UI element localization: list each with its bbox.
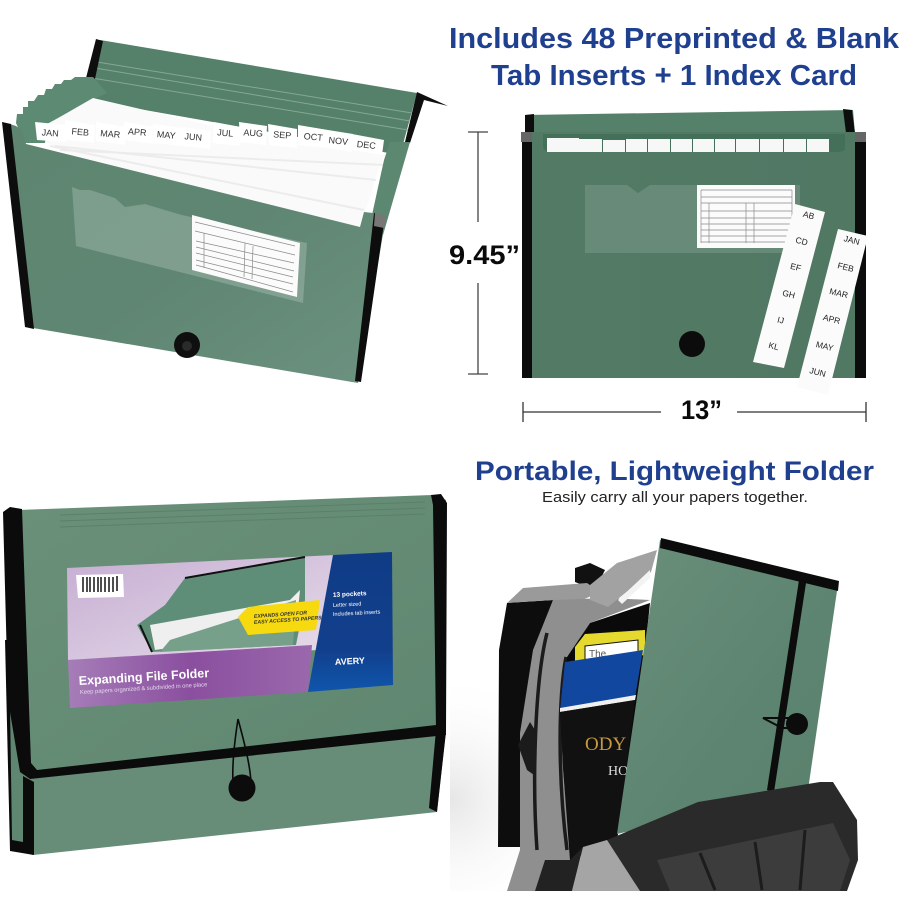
label strip AB to KL: GH (781, 288, 796, 300)
heading: portable: Portable, Lightweight Folder (475, 456, 875, 486)
panel: closed folder with label (3, 494, 447, 855)
label specs: 13 pockets (333, 590, 367, 599)
label strip JAN to JUN: MAY (815, 339, 835, 353)
label strip AB to KL: EF (789, 261, 802, 273)
label strip JAN to JUN: FEB (836, 260, 855, 274)
yellow notebook (575, 630, 645, 665)
white stripe (560, 695, 636, 712)
label specs: Letter sized (333, 602, 362, 609)
folder body (522, 132, 866, 378)
month tabs: AUG (243, 127, 263, 139)
label title: Expanding File Folder (78, 666, 210, 688)
heading: tab inserts: Includes 48 Preprinted & Blank (449, 23, 900, 55)
lower body (10, 690, 446, 855)
dimension: height (449, 132, 520, 374)
accordion gusset (16, 77, 107, 143)
heading: tab inserts (449, 23, 900, 92)
lower binding (5, 640, 34, 855)
back flap (88, 40, 417, 155)
photo background (450, 670, 580, 891)
yellow notebook: The (589, 649, 607, 660)
black book (560, 700, 635, 860)
month tabs: DEC (356, 139, 377, 151)
index card (192, 215, 300, 297)
backpack handle strap (575, 563, 605, 590)
month tabs: FEB (71, 126, 89, 138)
label photo area (67, 555, 335, 660)
papers (46, 98, 385, 227)
flap (18, 495, 446, 773)
label strip AB to KL: AB (802, 209, 816, 221)
product label (67, 552, 393, 708)
label strip AB to KL (753, 204, 825, 368)
mini folder (137, 557, 305, 652)
month tabs: JAN (41, 127, 59, 139)
label strip JAN to JUN: APR (822, 312, 841, 326)
binding caps (521, 132, 866, 142)
month tabs: JUN (184, 131, 202, 143)
label strip JAN to JUN: JAN (843, 233, 861, 247)
tab slot (543, 134, 845, 152)
index card (697, 185, 795, 248)
month tabs: SEP (273, 129, 292, 141)
zips (535, 633, 567, 850)
yellow tag (238, 600, 322, 635)
dimension: width: 13” (681, 395, 722, 425)
backpack top (507, 583, 600, 610)
lower strap (535, 847, 583, 891)
elastic loop (233, 719, 251, 782)
month tabs: MAR (100, 128, 121, 140)
yellow tag: EASY ACCESS TO PAPERS (254, 615, 322, 626)
dimension: width (523, 395, 866, 425)
back flap (525, 110, 855, 134)
flap lining (657, 823, 850, 891)
front panel (10, 124, 384, 383)
blue folder (560, 650, 643, 710)
backpack side body (507, 598, 650, 891)
label strip AB to KL: CD (795, 235, 809, 247)
avery logo: AVERY (335, 655, 365, 667)
label strip AB to KL: KL (767, 340, 780, 352)
zipper pull (518, 722, 535, 775)
barcode (76, 574, 124, 598)
label strip JAN to JUN: MAR (828, 286, 849, 300)
backpack handle (590, 550, 657, 607)
back flap black edges (86, 39, 448, 143)
tab strip (547, 138, 829, 152)
dimension: height: 9.45” (449, 240, 520, 270)
right gusset (372, 142, 410, 235)
heading: tab inserts: Tab Inserts + 1 Index Card (491, 60, 857, 92)
purple band (68, 645, 312, 708)
elastic loop (763, 718, 795, 728)
blue panel (308, 552, 393, 692)
label strip JAN to JUN (797, 229, 868, 395)
label strip JAN to JUN: JUN (808, 365, 827, 379)
side bindings (2, 122, 385, 382)
month tabs: MAY (156, 129, 176, 141)
panel: front folder with dimensions (521, 109, 868, 395)
button (228, 774, 256, 802)
clear pocket (585, 185, 800, 253)
black book: HO (608, 764, 628, 779)
label strip AB to KL: IJ (776, 314, 785, 326)
label specs: Includes tab inserts (333, 610, 381, 618)
label specs (333, 590, 381, 618)
clear pocket (72, 187, 307, 303)
button (174, 332, 200, 358)
handle gap (618, 570, 650, 604)
backpack front flap (583, 782, 858, 891)
subheading: Easily carry all your papers together. (542, 490, 808, 506)
panel: open folder with month tabs (2, 39, 448, 383)
black book: ODY (585, 734, 626, 755)
side bindings (522, 132, 866, 378)
panel: folder in backpack photo (450, 538, 858, 891)
button (786, 713, 808, 735)
button (679, 331, 705, 357)
elastic band (767, 580, 806, 792)
month tabs: OCT (303, 131, 324, 143)
month tabs: JUL (217, 127, 234, 139)
month tabs: NOV (328, 135, 349, 147)
label subtitle: Keep papers organized & subdivided in one place (80, 682, 208, 696)
backpack back pad (498, 600, 553, 847)
month tabs: APR (128, 126, 147, 138)
folder top binding (660, 538, 839, 591)
backpack interior (560, 603, 650, 860)
left gusset (7, 700, 24, 842)
green folder (617, 540, 838, 834)
month tabs (35, 120, 384, 155)
flap gray trim (572, 840, 640, 891)
flap black edges (3, 507, 446, 779)
yellow tag: EXPANDS OPEN FOR (254, 610, 307, 620)
